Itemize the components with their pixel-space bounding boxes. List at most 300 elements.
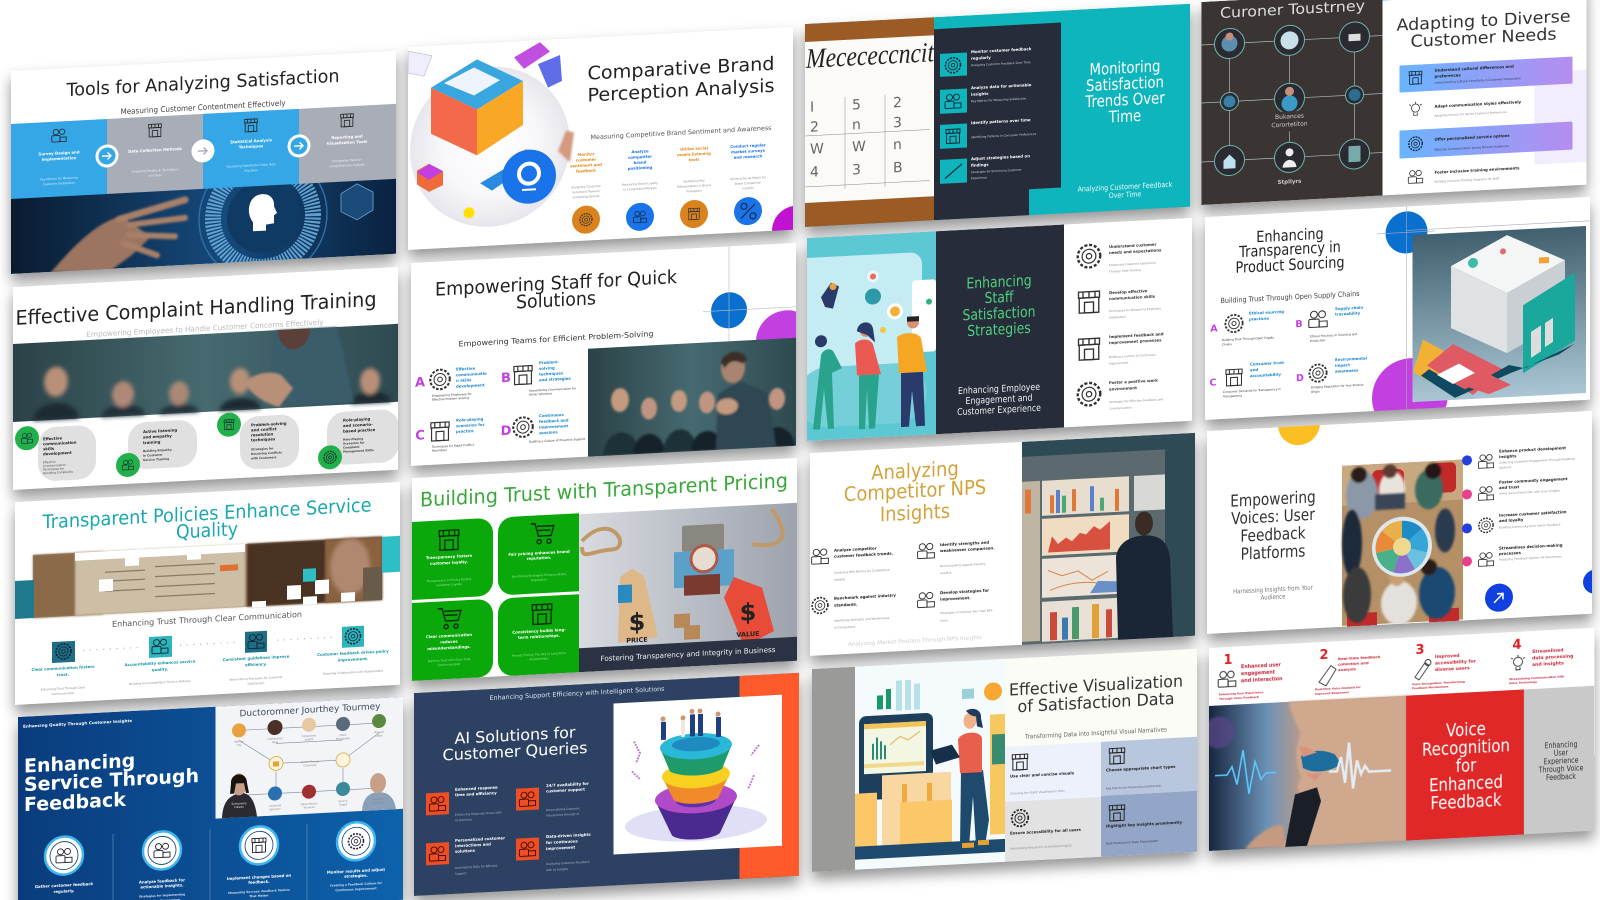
item B: traceability bbox=[1335, 310, 1361, 317]
item: benchmark: Identifying Strengths and Weaknesses bbox=[834, 616, 890, 623]
benefit 1: 1 bbox=[1223, 653, 1233, 668]
step: survey design: Customer Satisfaction bbox=[43, 181, 75, 186]
journey map panel: Source bbox=[339, 799, 348, 803]
title: Product Sourcing bbox=[1235, 254, 1345, 277]
step: reporting tools: Integrating Tools for bbox=[333, 158, 362, 163]
quadrant: clear visuals: Use clear and concise visuals bbox=[1010, 770, 1075, 779]
row: feedback processes: Building a Culture of Continuous bbox=[1109, 353, 1156, 359]
benefit 2 bbox=[1315, 645, 1381, 696]
photo: team and pointing leader bbox=[588, 338, 796, 457]
red title panel: for bbox=[1456, 755, 1476, 776]
item: data insights: Data-driven insights bbox=[546, 832, 591, 839]
step: clear communication: Clear communication fosters bbox=[32, 664, 95, 672]
item C: practice bbox=[456, 428, 474, 434]
title line 2: Solutions bbox=[516, 288, 596, 313]
item A: Ethical sourcing bbox=[1249, 309, 1284, 316]
item D: D bbox=[501, 424, 512, 439]
benefit 1: Enhancing User Experience bbox=[1219, 690, 1263, 696]
photo: seated group around wheel bbox=[1342, 460, 1463, 628]
item C: and bbox=[1250, 367, 1258, 372]
grey side panel: Enhancing bbox=[1545, 740, 1577, 751]
step: survey design: Key Metrics for Measuring bbox=[40, 175, 78, 181]
step: consistent guidelines: Streamlining Processes for Customer bbox=[229, 675, 283, 682]
row: product insights: insights bbox=[1499, 453, 1517, 459]
row: analyze data: insights bbox=[971, 91, 989, 97]
item A bbox=[415, 367, 486, 401]
title: Tools for Analyzing Satisfaction bbox=[66, 66, 339, 101]
card: role playing: Scenarios for bbox=[343, 441, 365, 446]
column: monitor sentiment: sentiment and bbox=[570, 162, 602, 168]
orange strip bbox=[740, 673, 800, 879]
slide: Building Trust with Transparent Pricing bbox=[412, 458, 797, 681]
card: reputation: Fair Pricing Strategies Enhance Brand bbox=[512, 572, 566, 579]
item: competitor feedback: Analyzing NPS Metrics for Competitive bbox=[834, 568, 890, 575]
card: clear communication: Communication bbox=[438, 662, 461, 667]
column: monitor sentiment: customer bbox=[576, 157, 596, 163]
slide: Effective Visualization of Satisfaction Data bbox=[812, 649, 1197, 872]
photo: price and value tags: $ bbox=[629, 608, 645, 637]
item C bbox=[1210, 360, 1284, 399]
item D: sessions bbox=[539, 429, 558, 435]
row: satisfaction: and loyalty bbox=[1499, 517, 1524, 523]
journey map panel: Target bbox=[339, 802, 347, 807]
item: response time bbox=[426, 784, 502, 824]
journey map panel: Sedtos bbox=[305, 737, 314, 741]
item D bbox=[502, 414, 586, 443]
step dots timeline bbox=[83, 637, 335, 650]
row: cultural differences: preferences bbox=[1434, 72, 1461, 79]
card: reputation bbox=[498, 513, 579, 595]
step: customer feedback bbox=[317, 624, 389, 676]
journey map panel: Consevarly bbox=[302, 733, 317, 738]
row: product insights: Enhance product development bbox=[1499, 445, 1566, 454]
row: monitor feedback: regularly bbox=[971, 55, 991, 61]
title: Time bbox=[1108, 107, 1141, 127]
card: communication: Handling Complaints bbox=[43, 470, 74, 475]
subtitle: Empowering Teams for Efficient Problem-Solving bbox=[458, 329, 654, 349]
journey map panel: Coder bbox=[375, 733, 384, 738]
column: analyze positioning: Analyze bbox=[631, 148, 649, 154]
row: needs: Enhancing Customer Experience bbox=[1109, 261, 1156, 267]
column: analyze positioning: positioning bbox=[628, 165, 653, 171]
card: reputation: Reputation bbox=[531, 577, 547, 582]
item: competitor feedback: Insights bbox=[834, 577, 846, 582]
card: reputation: Fair pricing enhances brand bbox=[508, 549, 570, 557]
card: communication: development bbox=[43, 450, 72, 456]
step: gather feedback: regularly. bbox=[54, 888, 75, 894]
card: problem solving: resolution bbox=[251, 431, 274, 438]
benefit 3: 3 bbox=[1415, 643, 1425, 658]
step: clear communication bbox=[32, 640, 95, 697]
row: decision making bbox=[1462, 542, 1563, 567]
row: positive environment: Strategies for Effective Feedback and bbox=[1109, 397, 1163, 404]
benefit 4: and insights bbox=[1532, 660, 1564, 668]
journey map panel: Warrup bbox=[234, 739, 244, 744]
item A: Effective bbox=[456, 366, 475, 372]
column: monitor sentiment: Monitor bbox=[577, 151, 595, 157]
row: training environments: Building Inclusive Training Programs for Staff bbox=[1434, 176, 1500, 184]
benefit 2: analysis bbox=[1338, 666, 1357, 672]
step: monitor results: strategies. bbox=[344, 873, 368, 879]
slide: Transparent Policies Enhance Service Quality bbox=[15, 482, 400, 705]
item D: improvement bbox=[539, 423, 568, 430]
slide: Enhancing Staff Satisfaction Strategies bbox=[797, 218, 1192, 442]
title: Monitoring bbox=[1090, 57, 1160, 79]
item: competitor feedback: customer feedback trends. bbox=[834, 551, 894, 559]
card: loyalty: Customer Loyalty bbox=[436, 582, 462, 587]
item C: scenarios for bbox=[456, 422, 485, 428]
step: accountability: quality. bbox=[152, 666, 169, 672]
card: listening: training bbox=[143, 439, 161, 445]
step: analyze feedback: actionable insights. bbox=[140, 882, 184, 890]
row: product insights: Collecting Customer Engagement Through Feedback bbox=[1499, 457, 1576, 465]
item D: feedback and bbox=[539, 417, 569, 424]
item: competitor feedback: Analyze competitor bbox=[834, 546, 877, 553]
row: needs: needs and expectations bbox=[1109, 247, 1162, 255]
soft lavender accent bbox=[1534, 70, 1586, 165]
title line 2: Quality bbox=[176, 518, 238, 544]
step: statistical analysis: Techniques bbox=[239, 143, 264, 150]
step: accountability: Accountability enhances service bbox=[125, 659, 196, 667]
benefit 4: Streamlined bbox=[1532, 647, 1564, 655]
journey map panel: Sanscovery bbox=[232, 801, 247, 806]
dark journey network panel: Stpllyrs bbox=[1278, 179, 1302, 186]
card: role playing: Complaint bbox=[343, 445, 360, 450]
eyebrow: Enhancing Quality Through Customer Insights bbox=[23, 718, 133, 729]
grey side panel: Feedback bbox=[1546, 772, 1576, 782]
item: data insights: Analyzing Customer Feedback bbox=[546, 860, 590, 866]
card: listening: Building Empathy bbox=[143, 448, 172, 453]
card: role playing bbox=[318, 409, 399, 470]
slide: AI Solutions for Customer Queries bbox=[414, 673, 800, 896]
step: accountability bbox=[125, 635, 196, 686]
journey map panel: Consents bbox=[269, 803, 282, 808]
row: adjust strategies bbox=[940, 153, 1030, 184]
journey map panel: Mountrown bbox=[336, 736, 351, 741]
journey map panel: Bredisot bbox=[373, 797, 383, 801]
title line 2: Perception Analysis bbox=[588, 76, 774, 107]
journey map panel: Daos Manvis bbox=[301, 801, 318, 806]
row: personalized service: Offer personalized service options bbox=[1434, 133, 1510, 142]
item B: Supply chain bbox=[1335, 305, 1363, 311]
step: statistical analysis: Practices bbox=[244, 168, 258, 173]
column: social listening: tools bbox=[689, 157, 700, 162]
row: needs: Through Staff Training bbox=[1108, 268, 1141, 274]
benefit 3: diverse users bbox=[1435, 665, 1470, 673]
step: analyze feedback: Analyze feedback for bbox=[139, 877, 185, 885]
row: community: and trust bbox=[1499, 484, 1519, 490]
item: 24/7 support: Interactions through AI bbox=[546, 812, 579, 818]
row: communication bbox=[1078, 287, 1161, 321]
item B: Streamlining Communication for bbox=[529, 386, 577, 393]
column: social listening: Identifying Key bbox=[683, 178, 705, 184]
photo: handwritten notes on wooden desk: 2 bbox=[893, 95, 902, 111]
item A: A bbox=[415, 375, 425, 391]
row: product insights: Systems bbox=[1499, 465, 1512, 470]
row: personalized service: Effective Communication Across Diverse Audiences bbox=[1434, 144, 1509, 152]
column: social listening: media listening bbox=[677, 151, 711, 157]
step: analyze feedback bbox=[139, 830, 185, 900]
title: Voices: User bbox=[1231, 505, 1316, 529]
item: data insights: for continuous bbox=[546, 838, 579, 845]
column: social listening: Perception bbox=[686, 189, 702, 193]
row: adjust strategies: Experience bbox=[971, 175, 987, 180]
journey map panel: Mowent bbox=[374, 730, 384, 734]
row: community bbox=[1462, 476, 1568, 501]
column: market surveys: Utilizing Social Media for bbox=[730, 175, 767, 181]
item: personalized interactions: Personalized customer bbox=[455, 835, 505, 843]
title: Effective Visualization bbox=[1009, 672, 1183, 700]
step: consistent guidelines: efficiency. bbox=[245, 661, 268, 667]
benefit 3: Improved bbox=[1435, 653, 1460, 660]
row: satisfaction: Increase customer satisfaction bbox=[1499, 509, 1567, 518]
slide: Monitoring Satisfaction Trends Over Time bbox=[805, 4, 1190, 227]
photo: price and value tags: VALUE bbox=[736, 630, 760, 639]
row: training environments bbox=[1408, 165, 1520, 185]
step: implement changes: Implement changes based on bbox=[227, 873, 291, 881]
item C: C bbox=[415, 428, 425, 444]
photo: manager pointing at team bbox=[13, 324, 398, 422]
grey side strip bbox=[812, 667, 855, 872]
row: community: Foster community engagement bbox=[1499, 476, 1568, 485]
item B: Faster Solutions bbox=[529, 391, 552, 397]
row: cultural differences: Understanding Cultural Sensitivity in Customer Interactions bbox=[1434, 76, 1521, 85]
item B: solving bbox=[539, 365, 555, 371]
subtitle: Engagement and bbox=[966, 393, 1032, 407]
column: market surveys: market surveys bbox=[731, 148, 766, 155]
illustration: layered funnel with team bbox=[614, 695, 782, 855]
step: implement changes bbox=[227, 825, 291, 900]
quadrant: chart types bbox=[1101, 737, 1197, 796]
row: monitor feedback: Monitor customer feedback bbox=[971, 46, 1032, 54]
card: communication: Techniques for bbox=[42, 466, 65, 472]
card: problem solving: Resolving Conflicts bbox=[251, 450, 282, 456]
subtitle: Enhancing Trust Through Clear Communication bbox=[112, 610, 302, 629]
item: benchmark: standards. bbox=[834, 601, 858, 608]
title: Satisfaction bbox=[1086, 73, 1164, 96]
title: Trends Over bbox=[1084, 89, 1166, 112]
photo: handwritten notes on wooden desk: B bbox=[893, 160, 903, 176]
row: feedback processes: Implement feedback and bbox=[1109, 331, 1164, 339]
step: monitor results: Creating a Feedback Culture for bbox=[330, 881, 383, 888]
quadrant: accessibility: Ensure accessibility for all users bbox=[1010, 827, 1082, 836]
column: market surveys: Conduct regular bbox=[730, 142, 766, 149]
item: strategies: Score bbox=[940, 618, 948, 623]
card: listening: and empathy bbox=[143, 433, 172, 440]
item A: Effective Problem-Solving bbox=[432, 396, 469, 402]
grey side panel: Through Voice bbox=[1538, 764, 1583, 775]
row: product insights bbox=[1462, 445, 1576, 472]
column: social listening bbox=[677, 145, 711, 229]
accent square right bbox=[382, 536, 400, 573]
photo: price and value tags bbox=[579, 503, 797, 672]
item: strategies bbox=[918, 587, 993, 624]
item: strengths bbox=[918, 539, 995, 576]
benefit 3 bbox=[1412, 640, 1477, 690]
quadrant: accessibility bbox=[1005, 797, 1101, 862]
step: customer feedback: improvement. bbox=[338, 656, 369, 663]
slide: Voice Recognition for Enhanced Feedback bbox=[1203, 628, 1594, 851]
step: clear communication: trust. bbox=[57, 672, 70, 677]
title: Feedback bbox=[24, 789, 126, 816]
title: Enhancing bbox=[24, 750, 135, 778]
item: benchmark: Benchmark against industry bbox=[834, 592, 896, 601]
step: data collection bbox=[107, 114, 203, 194]
row: positive environment: environment bbox=[1109, 385, 1137, 392]
item A: development bbox=[456, 382, 485, 389]
item: strengths: Identify strengths and bbox=[940, 540, 989, 547]
photo: handwritten notes on wooden desk bbox=[805, 17, 935, 227]
step: analyze feedback: Strategies for Implementing bbox=[139, 892, 185, 899]
column: market surveys bbox=[730, 142, 767, 226]
title: Transparency in bbox=[1238, 239, 1341, 262]
row: monitor feedback bbox=[940, 46, 1032, 77]
item D: Bridging Reputation for Your Product bbox=[1311, 383, 1365, 389]
card: problem solving: and conflict bbox=[251, 426, 277, 433]
card: communication: communication bbox=[43, 440, 77, 446]
row: decision making: processes bbox=[1499, 550, 1522, 556]
item: benchmark bbox=[812, 592, 896, 631]
item B bbox=[502, 360, 576, 396]
item D bbox=[1296, 356, 1367, 395]
photo: handwritten notes on wooden desk: I bbox=[810, 100, 814, 116]
row: cultural differences bbox=[1400, 57, 1572, 93]
item C: Consumer trust bbox=[1250, 360, 1284, 367]
photo: handwritten notes on wooden desk: W bbox=[810, 141, 824, 158]
caption band bbox=[579, 637, 797, 672]
step: consistent guidelines: Consistent guidelines improve bbox=[223, 654, 290, 662]
title: Competitor NPS bbox=[844, 476, 986, 506]
dark content panel bbox=[934, 23, 1061, 220]
benefit 3: accessibility for bbox=[1435, 658, 1477, 667]
quadrant: clear visuals bbox=[1005, 742, 1101, 802]
column: social listening: Differentiators in Brand bbox=[677, 183, 711, 189]
card: clear communication: Building Trust with Clear Cost bbox=[428, 657, 471, 663]
journey map panel: Tecsener bbox=[303, 805, 316, 810]
step: data collection: Analyzing Feedback: Techniques bbox=[132, 167, 179, 174]
accent square left bbox=[15, 580, 34, 619]
feedback list bbox=[1462, 445, 1576, 567]
card: reputation: reputation. bbox=[527, 555, 552, 561]
item B: Production bbox=[1310, 338, 1326, 343]
item: data insights: with AI Insights bbox=[546, 867, 569, 872]
slide: Effective Complaint Handling Training bbox=[13, 267, 399, 490]
row: communication styles bbox=[1409, 96, 1522, 119]
card: role playing: and scenario- bbox=[343, 422, 373, 428]
decorative corner circle bbox=[772, 206, 793, 231]
dark journey network panel bbox=[1202, 0, 1382, 205]
benefit 4 bbox=[1509, 635, 1573, 685]
column: monitor sentiment: feedback bbox=[576, 168, 596, 174]
journey map panel: Comnasty bbox=[303, 763, 317, 768]
item: response time: Enhanced response bbox=[455, 785, 498, 792]
item: personalized interactions: Automating FAQs for Efficient bbox=[455, 864, 498, 870]
row: communication styles: Adapting Service for Varied Customer Preferences bbox=[1434, 110, 1507, 118]
item B: Problem- bbox=[539, 359, 559, 365]
card: loyalty: Transparency fosters bbox=[426, 553, 473, 560]
title: Strategies bbox=[967, 320, 1031, 340]
journey map panel: Ductoromner Jourthey Tourmey bbox=[240, 702, 380, 719]
title: Enhancing bbox=[966, 272, 1032, 293]
card: consistency: Honest Pricing: The Key to Long-Term bbox=[512, 651, 566, 658]
top accent bar bbox=[1382, 0, 1462, 1]
title: Comparative Brand bbox=[588, 54, 774, 85]
item: strategies: Strategies to Improve Your Own NPS bbox=[940, 608, 993, 615]
card: problem solving: Problem-solving bbox=[251, 421, 287, 428]
photo: handwritten notes on wooden desk: Mecececcncit bbox=[805, 37, 935, 75]
item A bbox=[1210, 309, 1284, 347]
illustration: team handshake bbox=[797, 231, 936, 442]
subtitle: Transforming Data into Insightful Visual Narratives bbox=[1024, 726, 1167, 741]
benefit 2: Real-time feedback bbox=[1338, 654, 1381, 661]
journey map panel bbox=[216, 697, 404, 819]
item: data insights bbox=[516, 832, 591, 874]
item: personalized interactions: Support bbox=[455, 871, 467, 876]
red title panel: Voice bbox=[1446, 718, 1486, 741]
subtitle: Empowering Employees to Handle Customer Concerns Effectively bbox=[86, 318, 324, 339]
step: reporting tools: Reporting and bbox=[331, 134, 363, 140]
row: communication: communication skills bbox=[1109, 294, 1156, 301]
step: statistical analysis: Statistical Analysis bbox=[230, 137, 273, 144]
row: adjust strategies: findings bbox=[971, 162, 989, 168]
slide: Comparative Brand Perception Analysis bbox=[408, 27, 793, 250]
row: identify patterns bbox=[940, 117, 1037, 149]
subtitle: Enhancing Support Efficiency with Intelligent Solutions bbox=[490, 686, 664, 702]
row: community: Using Social Interaction with User Insights bbox=[1499, 488, 1560, 496]
slide: Empowering Voices: User Feedback Platforms bbox=[1207, 387, 1600, 635]
quadrant: clear visuals: Choosing the Right Visualization Tools bbox=[1010, 789, 1065, 796]
slide: Empowering Staff for Quick Solutions bbox=[411, 242, 816, 466]
column: analyze positioning: in Competitive Markets bbox=[623, 186, 657, 192]
card: role playing: Management Skills bbox=[343, 448, 374, 454]
card: listening: in Customer bbox=[143, 453, 163, 458]
column: monitor sentiment bbox=[570, 151, 602, 234]
item: benchmark: in Competitors bbox=[834, 625, 856, 630]
title: AI Solutions for bbox=[454, 723, 576, 748]
subtitle: Measuring Customer Contentment Effectively bbox=[120, 99, 286, 116]
item D: impact bbox=[1335, 362, 1350, 368]
item D: awareness bbox=[1335, 368, 1359, 374]
item: response time: time and efficiency bbox=[455, 790, 497, 797]
row: positive environment: Communication bbox=[1109, 405, 1132, 411]
item C: accountability bbox=[1250, 372, 1282, 378]
item A: n skills bbox=[456, 377, 472, 383]
title: Adapting to Diverse bbox=[1397, 7, 1571, 35]
title: Staff bbox=[985, 289, 1014, 308]
card: problem solving: with Customers bbox=[251, 455, 277, 461]
item: personalized interactions: solutions bbox=[455, 848, 476, 854]
title: Enhancing bbox=[1256, 226, 1324, 247]
step: gather feedback: Gather customer feedback bbox=[35, 881, 94, 889]
subtitle: Building Trust Through Open Supply Chains bbox=[1221, 289, 1360, 305]
caption band: Fostering Transparency and Integrity in Business bbox=[600, 645, 776, 663]
card: problem solving bbox=[217, 409, 299, 471]
photo: handwritten notes on wooden desk: n bbox=[852, 117, 861, 134]
row: communication: Develop effective bbox=[1109, 288, 1148, 295]
item: personalized interactions bbox=[426, 835, 505, 877]
row: decision making: Analyzing Feedback Options for Businesses bbox=[1499, 554, 1562, 562]
column: market surveys: Brand Comparison bbox=[735, 180, 762, 186]
illustration: warehouse analyst with monitor bbox=[855, 659, 1005, 870]
title: Building Trust with Transparent Pricing bbox=[420, 468, 788, 512]
title: Empowering bbox=[1230, 487, 1316, 511]
step: data collection: Data Collection Methods bbox=[128, 146, 183, 154]
title: Satisfaction bbox=[962, 303, 1036, 325]
card: problem solving: techniques bbox=[251, 436, 276, 443]
benefit 4: data processing bbox=[1532, 653, 1573, 662]
item C: Resolution bbox=[432, 448, 447, 453]
item B bbox=[1295, 305, 1363, 344]
